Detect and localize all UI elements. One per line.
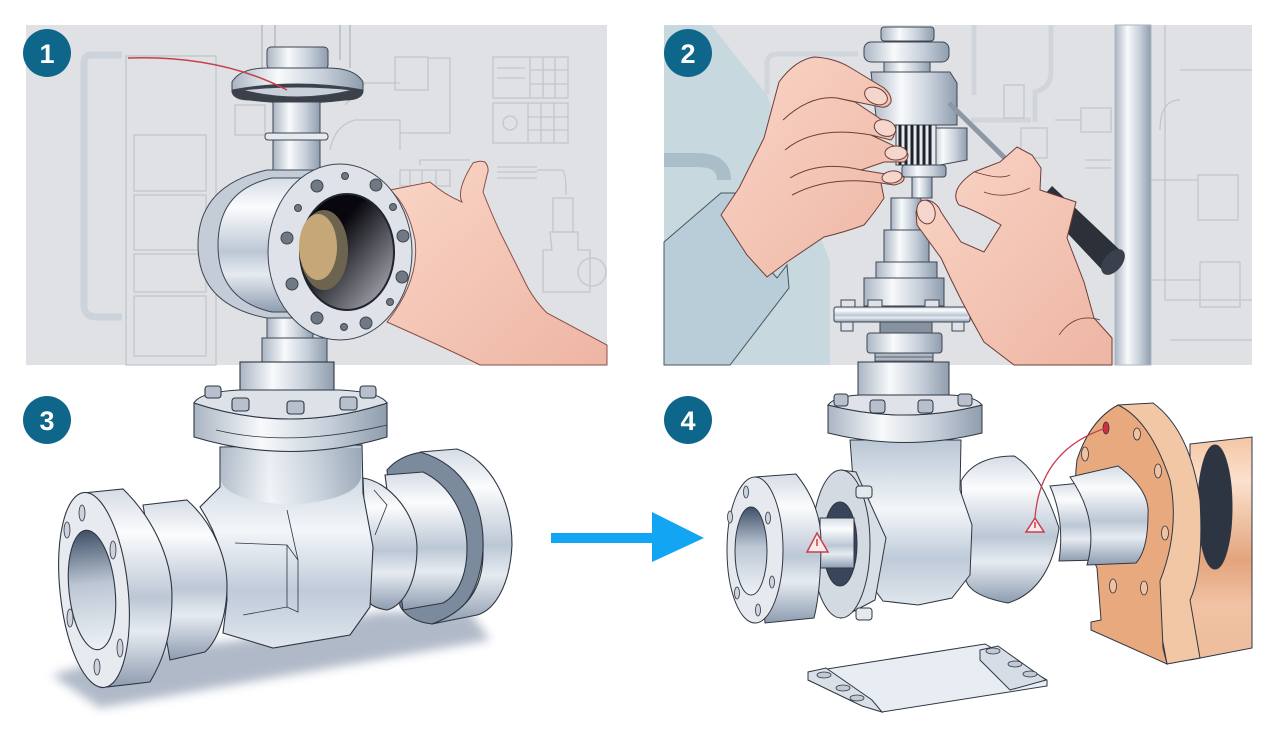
valve 4 body — [850, 440, 972, 605]
panel 2 background — [664, 25, 1252, 365]
valve 1 bore interior — [299, 210, 348, 290]
badge 1 — [23, 29, 71, 77]
valve 3 — [50, 362, 512, 691]
valve 4 neck — [858, 362, 949, 400]
valve 1 lower stem — [262, 318, 327, 366]
valve 2 top cap — [864, 27, 949, 72]
copper flange face and pedestal — [1076, 405, 1173, 664]
red indicator line, step 1 — [128, 58, 287, 90]
right thumb nail — [914, 198, 938, 226]
sleeve, step 2 — [664, 193, 789, 365]
badge 1: 1 — [39, 39, 55, 69]
valve 2 lower collar — [930, 128, 967, 165]
valve 2 gear — [896, 125, 936, 165]
valve 1 bolts — [281, 172, 409, 330]
valve 3 dark ring — [387, 452, 483, 624]
left hand, step 2 — [721, 57, 908, 277]
blue arrow — [551, 512, 704, 562]
valve 4 right flange disc — [961, 456, 1059, 603]
badge 3 — [23, 396, 71, 444]
valve 3 left flange — [83, 489, 172, 687]
valve 3 neck — [240, 362, 334, 400]
badge 4: 4 — [680, 406, 696, 436]
right hand, step 2 — [914, 147, 1112, 365]
warning triangle left — [807, 533, 828, 552]
valve 1 body — [198, 170, 340, 318]
valve 1 front flange — [268, 164, 412, 340]
valve 4 outlet pipe — [1050, 482, 1100, 561]
copper flange back — [1118, 403, 1201, 664]
valve 2 assembly — [834, 27, 970, 365]
valve 3 right collar — [385, 472, 467, 610]
valve 4 bonnet — [828, 394, 982, 442]
hand, step 1 — [387, 161, 607, 365]
valve 2 stem — [864, 165, 946, 306]
copper flange holes — [1082, 422, 1168, 595]
valve 2 upper collar — [871, 72, 957, 125]
valve 4 bore — [735, 507, 767, 595]
valve 1 assembly — [198, 47, 607, 366]
valve 1 stem — [265, 102, 328, 172]
valve 3 waist — [363, 478, 417, 610]
valve 1 top flange — [232, 47, 363, 103]
loose plate — [808, 644, 1047, 712]
valve 4 outlet collar — [1070, 466, 1148, 565]
valve 3 bonnet — [194, 386, 387, 452]
red indicator line, step 4 — [1035, 428, 1106, 518]
valve 4 left flange — [755, 474, 821, 623]
dark seal — [1198, 445, 1232, 569]
copper side cylinder — [1190, 437, 1252, 660]
valve 3 flange face — [50, 489, 138, 691]
badge 2 — [664, 29, 712, 77]
valve 4 split flange — [812, 470, 886, 620]
valve 3 bolt holes — [64, 505, 123, 675]
warning triangle right — [1026, 518, 1044, 532]
valve 3 ground shadow — [52, 612, 490, 708]
screwdriver — [949, 103, 1130, 279]
valve 3 bore — [63, 528, 121, 652]
valve 3 left pipe — [143, 500, 227, 660]
valve 2 threaded neck — [867, 333, 942, 365]
badge 2: 2 — [680, 39, 696, 69]
left hand fingernails — [862, 84, 907, 184]
vertical pipe — [1115, 25, 1151, 365]
valve 4 — [727, 362, 1252, 712]
valve 2 bolted flange — [834, 300, 970, 333]
badge 4 — [664, 396, 712, 444]
valve 3 right flange rim — [420, 449, 512, 624]
valve 4 bolt holes — [728, 486, 774, 616]
panel 2 background blue wall — [664, 25, 830, 365]
panel 1 background — [26, 25, 607, 365]
right hand shape — [916, 147, 1112, 365]
left hand palm and fingers — [721, 57, 908, 277]
valve 4 flange face — [727, 477, 783, 623]
valve 3 body — [200, 445, 387, 648]
valve 1 bore — [300, 194, 394, 310]
badge 3: 3 — [39, 406, 55, 436]
